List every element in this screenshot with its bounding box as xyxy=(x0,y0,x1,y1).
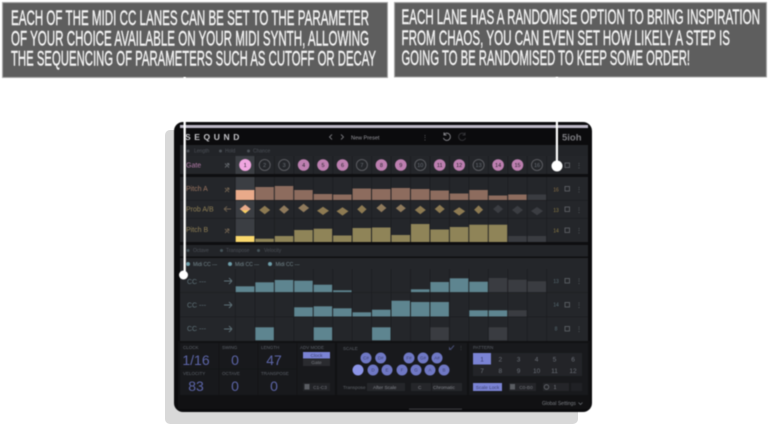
pattern grid: 11 xyxy=(551,368,558,375)
scale note circles: D xyxy=(371,368,375,373)
CV range control xyxy=(303,383,330,391)
pattern grid: 4 xyxy=(535,356,539,364)
gate step circles: 3 xyxy=(283,163,286,169)
panel: step settings xyxy=(180,343,335,395)
panel: step settings: OCTAVE xyxy=(222,371,240,376)
lane: Prob A/B: Prob A/B xyxy=(186,206,214,214)
panel: pattern: PATTERN xyxy=(473,345,493,350)
gate lane menu: ⋮ xyxy=(576,164,582,170)
lane: CC 3: CC --- xyxy=(187,326,207,333)
adv mode toggle xyxy=(300,345,330,366)
scale note circles: F# xyxy=(406,356,412,361)
gate options row: Length xyxy=(194,148,210,154)
icon: undo and redo xyxy=(443,132,466,140)
lane: CC 3: ⋮ xyxy=(576,327,582,333)
scale note circles: D# xyxy=(378,356,384,361)
gate options row: Chance xyxy=(253,148,270,154)
gate step circles xyxy=(239,159,542,171)
transpose dropdowns: C xyxy=(418,385,422,391)
gate step circles: 15 xyxy=(514,163,521,169)
pattern controls xyxy=(473,383,582,391)
scale note circles: A# xyxy=(434,356,440,361)
panel: step settings: SWING xyxy=(222,345,238,350)
pattern grid: 3 xyxy=(517,356,521,364)
panel: scale: ⋮ xyxy=(458,346,464,352)
CC options row: Octave xyxy=(193,248,209,254)
gate step circles: 16 xyxy=(534,163,540,169)
gate step circles: 9 xyxy=(399,163,402,169)
panel: step settings: 47 xyxy=(266,352,282,368)
transpose dropdowns: After Scale xyxy=(373,385,397,391)
lane: CC 3 xyxy=(180,317,588,340)
scale note circles: F xyxy=(401,368,404,373)
logo: SEQUND: SEQUND xyxy=(185,132,243,142)
arrow: pointer to MIDI CC lanes xyxy=(179,77,188,280)
pattern grid: 2 xyxy=(498,356,502,364)
pattern controls: C0-B0 xyxy=(519,385,533,391)
adv mode toggle: Gate xyxy=(311,360,322,366)
panel: step settings: TRANSPOSE xyxy=(261,371,289,376)
transpose dropdowns: Chromatic xyxy=(433,385,455,391)
panel: randomise callout xyxy=(394,2,766,77)
transpose dropdowns xyxy=(343,383,462,391)
gate step circles: 10 xyxy=(417,163,423,169)
text: MIDI CC callout copy: EACH OF THE MIDI CC LANES CAN BE SET TO THE PARAMETER xyxy=(11,7,369,30)
panel: Seqund app window xyxy=(174,122,592,412)
lane: Pitch B: 14 xyxy=(553,228,559,234)
pattern grid: 9 xyxy=(517,368,521,375)
lane: Prob A/B xyxy=(180,200,588,216)
lane: Gate: Gate xyxy=(186,162,201,170)
CC group grid lines xyxy=(235,269,547,341)
pattern grid: 8 xyxy=(498,368,502,375)
lane: Pitch B: ⋮ xyxy=(576,228,582,234)
CC options row: Transpose xyxy=(226,248,250,254)
lane: Prob A/B: ⋮ xyxy=(576,208,582,214)
scale note circles: G xyxy=(414,368,418,373)
panel: step settings: LENGTH xyxy=(261,345,279,350)
pitch group grid lines xyxy=(235,177,547,242)
lane: CC 1: ⋮ xyxy=(576,279,582,285)
lanes: MIDI CC group background xyxy=(180,258,588,341)
gate step circles: 4 xyxy=(302,163,305,169)
lane: CC 2: CC --- xyxy=(187,302,207,310)
adv mode toggle: Clock xyxy=(310,353,323,359)
text: MIDI CC callout copy xyxy=(11,7,376,70)
pattern grid: 1 xyxy=(480,356,484,364)
panel: scale: SCALE xyxy=(343,346,358,351)
arrow: pointer to randomise button xyxy=(552,77,562,172)
panel: step settings: VELOCITY xyxy=(183,371,205,376)
scale note circles: A xyxy=(428,368,432,373)
panel: scale xyxy=(337,343,467,395)
lane: Gate xyxy=(180,156,588,174)
gate lane menu xyxy=(565,163,582,170)
scale note circles: C# xyxy=(363,356,369,361)
pattern grid: 7 xyxy=(480,368,484,375)
home indicator xyxy=(409,408,462,410)
transpose dropdowns: Transpose xyxy=(343,385,366,391)
pattern controls: 1 xyxy=(554,385,557,391)
gate step circles: 2 xyxy=(263,163,266,169)
gate step circles: 5 xyxy=(321,163,325,169)
gate step circles: 6 xyxy=(341,163,344,169)
gate step circles: 12 xyxy=(456,163,462,169)
lane: Prob A/B: 13 xyxy=(553,208,559,214)
scale note circles: B xyxy=(442,368,446,373)
gate step circles: 13 xyxy=(476,163,482,169)
panel: step settings: 0 xyxy=(231,378,239,394)
lane: Pitch A: ⋮ xyxy=(576,188,582,194)
CC options row xyxy=(180,245,588,256)
text: randomise callout copy xyxy=(402,6,760,70)
panel: step settings: 0 xyxy=(231,352,239,368)
header bar xyxy=(185,132,582,144)
gate step circles: 1 xyxy=(244,163,247,169)
MIDI CC selector row xyxy=(186,262,300,268)
pattern grid: 12 xyxy=(569,368,577,375)
panel: pattern xyxy=(469,343,588,395)
preset selector: New Preset xyxy=(351,136,380,142)
scale note circles: E xyxy=(385,368,389,373)
lane: CC 2: 14 xyxy=(553,302,559,308)
lane: CC 3: 8 xyxy=(555,326,558,332)
lanes: pitch group background xyxy=(180,177,588,242)
icon: scale edit xyxy=(450,346,454,350)
preset selector xyxy=(330,134,428,142)
lane: CC 2 xyxy=(180,292,588,317)
gate options row xyxy=(180,145,588,156)
logo: brand mark: 5ioh xyxy=(562,132,582,144)
lane: CC 2: ⋮ xyxy=(576,303,582,309)
gate options row: Hold xyxy=(225,148,236,154)
lane: CC 1 xyxy=(187,278,582,292)
drop shadow behind device xyxy=(165,130,578,424)
lane: Pitch B xyxy=(180,218,588,242)
lane: CC 1: 13 xyxy=(553,279,559,285)
lane: Pitch A xyxy=(186,186,582,200)
text: MIDI CC callout copy: THE SEQUENCING OF PARAMETERS SUCH AS CUTOFF OR DECAY xyxy=(11,48,376,70)
CC options row: Velocity xyxy=(264,248,282,254)
gate step circles: 14 xyxy=(495,163,501,169)
scale note circles: G# xyxy=(420,356,426,361)
MIDI CC selector row: Midi CC --- xyxy=(193,262,217,268)
pattern controls: Scale Lock xyxy=(476,385,500,391)
highlighted first step xyxy=(236,177,255,242)
MIDI CC selector row: Midi CC --- xyxy=(276,262,300,268)
pattern grid: 5 xyxy=(553,356,557,364)
adv mode toggle: ADV MODE xyxy=(300,345,324,350)
pattern grid xyxy=(473,353,582,376)
scale note circles xyxy=(352,352,450,376)
gate step circles: 8 xyxy=(380,163,383,169)
bottom bar xyxy=(178,341,590,409)
gate step circles: 7 xyxy=(360,163,363,169)
preset selector: ⋮ xyxy=(422,136,428,142)
CV range control: C1-C3 xyxy=(313,385,327,391)
MIDI CC selector row: Midi CC --- xyxy=(235,262,259,268)
panel: step settings: 0 xyxy=(270,378,278,394)
pattern grid: 10 xyxy=(533,368,541,375)
lane: Pitch B: Pitch B xyxy=(186,227,209,234)
panel: step settings: 1/16 xyxy=(182,352,210,368)
lane: Pitch A: 16 xyxy=(553,188,559,194)
panel: step settings: 83 xyxy=(188,378,204,394)
text: MIDI CC callout copy: OF YOUR CHOICE AVAILABLE ON YOUR MIDI SYNTH, ALLOWING xyxy=(11,28,369,50)
lane: Pitch A: Pitch A xyxy=(186,186,208,193)
panel: MIDI CC callout xyxy=(2,2,388,78)
gate step circles: 11 xyxy=(437,163,443,169)
global settings: Global Settings xyxy=(542,401,576,407)
pattern grid: 6 xyxy=(571,356,575,364)
icon: gate random xyxy=(225,164,229,168)
panel: step settings: CLOCK xyxy=(183,345,199,350)
lane: CC 1: CC --- xyxy=(187,279,207,286)
